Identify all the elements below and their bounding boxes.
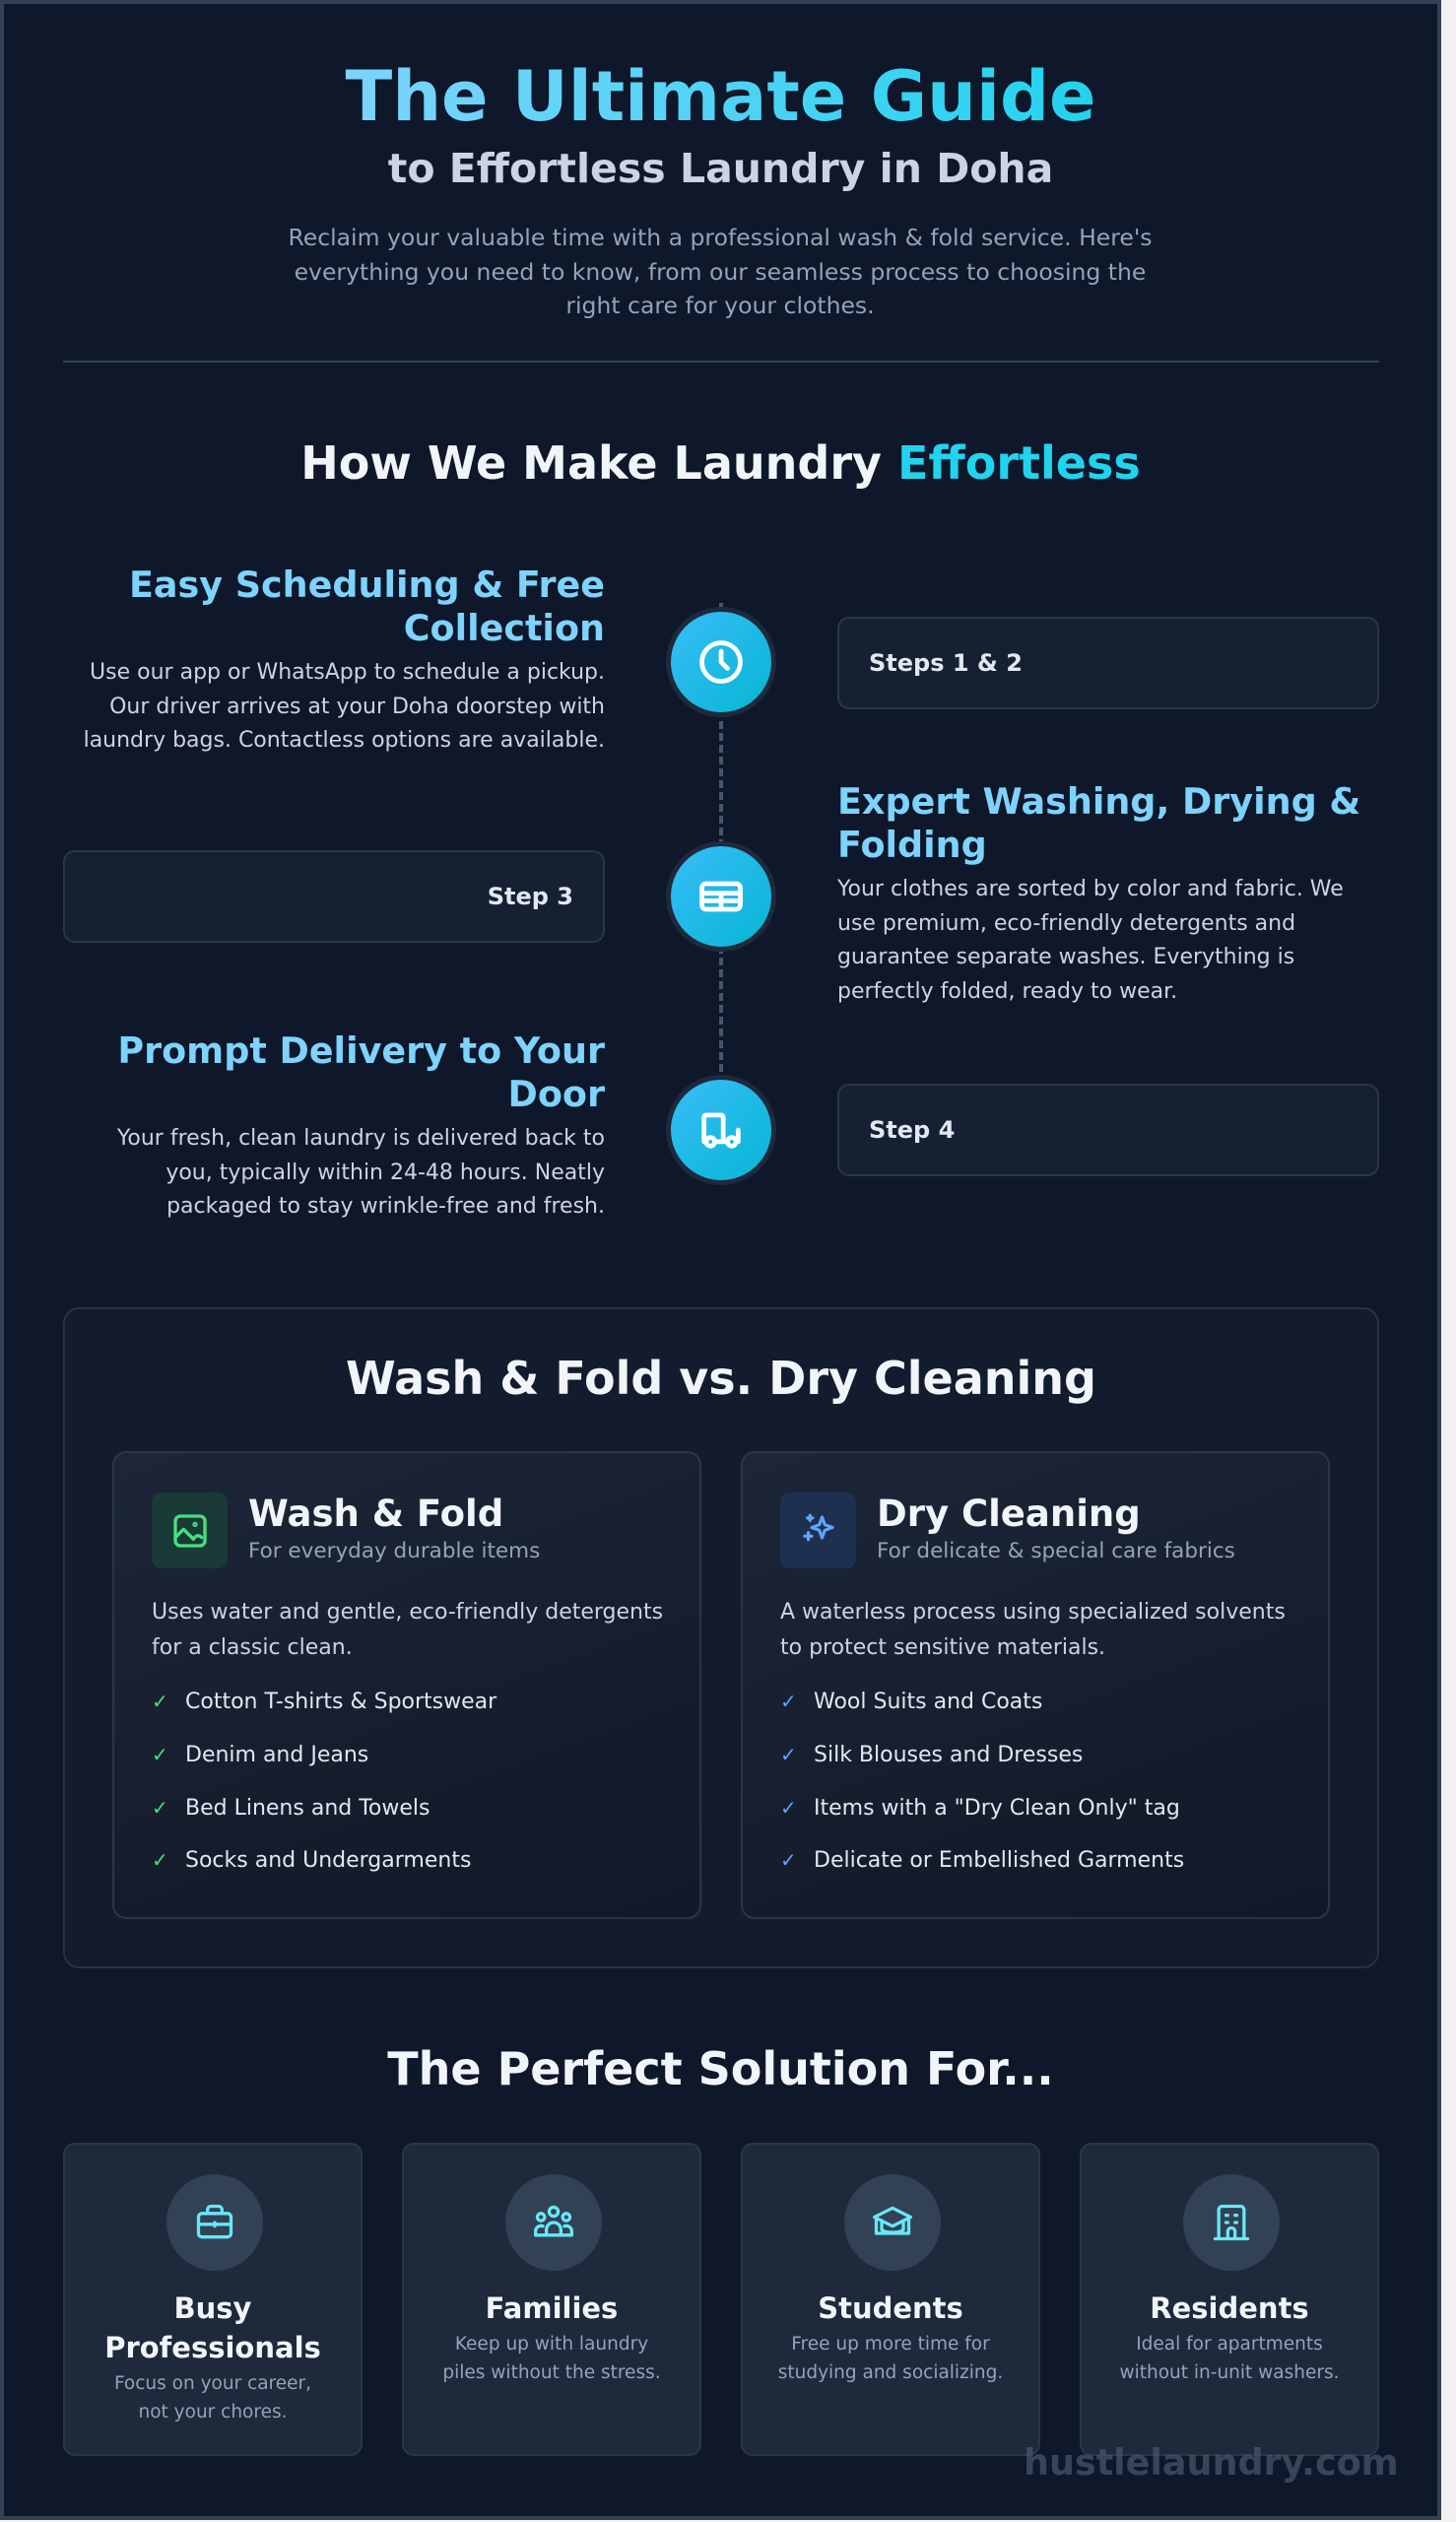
icon: graduation cap [844,2174,941,2271]
card: students: Students [818,2291,963,2325]
box: step 4 [837,1084,1379,1176]
icon: building [1183,2174,1280,2271]
step 2 text [837,780,1360,1003]
list: ✓ [780,1690,797,1713]
comparison heading: Wash & Fold vs. Dry Cleaning [346,1352,1096,1405]
card: wash & fold: For everyday durable items [248,1539,540,1563]
icon: truck [666,1075,776,1185]
description: A waterless process using specialized solvents to protect sensitive materials. [780,1600,1286,1660]
card: residents [1080,2143,1379,2456]
box: step 3: Step 3 [488,883,573,910]
step 3 text: Your fresh, clean laundry is delivered back to you, typically within 24-48 hours. Neatly packaged to stay wrinkle-free and fresh. [117,1126,605,1219]
heading: how we make laundry effortless: How We Make Laundry Effortless [300,436,1141,490]
step 2 text: Expert Washing, Drying & Folding [837,780,1360,866]
card: students: Free up more time for studying and socializing. [778,2334,1003,2383]
card: residents: Ideal for apartments without in-unit washers. [1119,2334,1340,2383]
list: Wool Suits and Coats [814,1690,1042,1714]
list: Denim and Jeans [185,1743,368,1767]
timeline line [719,603,723,1095]
list: Cotton T-shirts & Sportswear [185,1690,496,1714]
step 1 text: Use our app or WhatsApp to schedule a pickup. Our driver arrives at your Doha doorstep with laundry bags. Contactless options are available. [84,660,605,753]
icon: image [152,1493,228,1568]
step 1 text [84,564,605,753]
step 1 text: Easy Scheduling & Free Collection [129,564,605,649]
card: families [402,2143,701,2456]
list [780,1690,1184,1873]
card: dry cleaning [741,1451,1330,1919]
card: students [741,2143,1040,2456]
description: Uses water and gentle, eco-friendly detergents for a classic clean. [152,1600,663,1660]
list: ✓ [152,1796,168,1820]
card: families: Keep up with laundry piles without the stress. [442,2334,661,2383]
list: Delicate or Embellished Garments [814,1848,1184,1873]
list: Socks and Undergarments [185,1848,471,1873]
list: ✓ [152,1690,168,1713]
step 2 text: Your clothes are sorted by color and fabric. We use premium, eco-friendly detergents and guarantee separate washes. Everything is perfectly folded, ready to wear. [837,877,1344,1003]
list: ✓ [152,1743,168,1766]
card: busy professionals: Focus on your career, not your chores. [114,2373,311,2422]
step 3 text: Prompt Delivery to Your Door [117,1029,605,1115]
list: ✓ [152,1848,168,1872]
icon: sparkles [780,1493,856,1568]
box: step 4: Step 4 [869,1116,955,1144]
list: Items with a "Dry Clean Only" tag [814,1796,1180,1821]
list: ✓ [780,1743,797,1766]
list [152,1690,496,1873]
icon: washer [666,841,776,952]
card: residents: Residents [1150,2291,1309,2325]
box: steps 1 & 2: Steps 1 & 2 [869,649,1023,677]
box: steps 1 & 2 [837,617,1379,709]
list: ✓ [780,1848,797,1872]
card: wash & fold [112,1451,701,1919]
list: Silk Blouses and Dresses [814,1743,1083,1767]
card title: Dry Cleaning [877,1493,1141,1535]
card: families: Families [486,2291,618,2325]
panel: comparison [63,1307,1379,1968]
list: ✓ [780,1796,797,1820]
intro paragraph: Reclaim your valuable time with a professional wash & fold service. Here's everything you need to know, from our seamless process to choosing the right care for your clothes. [288,224,1153,319]
title: The Ultimate Guide [345,56,1096,137]
card: busy professionals: Busy Professionals [104,2291,321,2364]
card title: Wash & Fold [248,1493,503,1535]
list: Bed Linens and Towels [185,1796,430,1821]
subtitle: to Effortless Laundry in Doha [388,145,1053,192]
heading: perfect solution: The Perfect Solution For... [387,2042,1054,2095]
watermark: hustlelaundry.com [1024,2441,1399,2484]
icon: users [505,2174,602,2271]
card: busy professionals [63,2143,363,2456]
box: step 3 [63,850,605,943]
icon: briefcase [166,2174,263,2271]
icon: clock [666,607,776,717]
step 3 text [116,1029,605,1219]
card: dry cleaning: For delicate & special care fabrics [877,1539,1235,1563]
